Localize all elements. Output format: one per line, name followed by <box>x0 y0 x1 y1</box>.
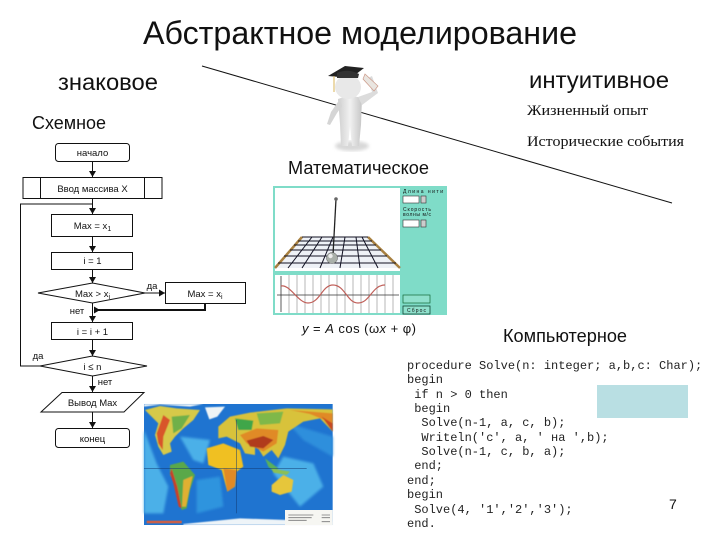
code listing: begin <box>407 488 443 502</box>
label exit no: нет <box>98 377 113 388</box>
heading: intuitive modelling: интуитивное <box>529 67 669 93</box>
control panel <box>403 189 443 314</box>
heading: mathematical: Математическое <box>288 158 429 178</box>
code listing <box>407 359 702 531</box>
code listing: Solve(4, '1','2','3'); <box>407 503 573 517</box>
code listing: begin <box>407 373 443 387</box>
label loop yes: да <box>33 351 44 362</box>
heading: schematic: Схемное <box>32 113 106 133</box>
heading: computer: Компьютерное <box>503 326 627 346</box>
text: life experience: Жизненный опыт <box>527 103 648 119</box>
code listing: end; <box>407 474 436 488</box>
code listing: Solve(n-1, c, b, a); <box>407 445 565 459</box>
assignment Max <box>52 214 132 236</box>
decision i less than n <box>40 356 147 376</box>
continents <box>144 404 333 525</box>
code listing: end. <box>407 517 436 531</box>
title: Абстрактное моделирование <box>143 15 577 51</box>
label yes: да <box>147 281 158 292</box>
diagonal divider line <box>202 66 672 203</box>
decision Max greater than x: Max > x <box>75 289 108 300</box>
text: historical events: Исторические события <box>527 134 684 150</box>
icon: graduate figure with diploma <box>327 66 378 151</box>
assignment Max: Max = x <box>74 221 107 232</box>
code listing: if n > 0 then <box>407 388 508 402</box>
code listing: procedure Solve(n: integer; a,b,c: Char); <box>407 359 702 373</box>
flow connectors <box>20 161 205 428</box>
decision i less than n: i ≤ n <box>84 362 101 373</box>
flowchart <box>20 144 246 448</box>
label no: нет <box>70 306 85 317</box>
code listing: begin <box>407 402 450 416</box>
elevation scale <box>147 521 182 523</box>
world map <box>144 404 333 525</box>
assignment Max from x: i <box>221 294 223 301</box>
end node: конец <box>80 434 106 445</box>
code listing: Writeln('c', a, ' на ',b); <box>407 431 609 445</box>
input node <box>23 178 162 198</box>
formula: y = A cos (ωx + φ) <box>301 321 416 336</box>
assignment Max from x: Max = x <box>187 289 221 300</box>
assignment i: i = 1 <box>83 256 102 267</box>
control panel: Сброс <box>407 308 426 314</box>
decision Max greater than x: i <box>108 294 110 301</box>
input node: Ввод массива X <box>57 184 128 195</box>
control panel: Скорость <box>403 207 431 213</box>
map legend <box>285 510 333 525</box>
graticule <box>144 420 307 513</box>
code listing: end; <box>407 459 443 473</box>
shallow water <box>144 423 333 513</box>
end node <box>56 428 130 448</box>
3D scene <box>275 188 400 271</box>
wave graph <box>275 275 400 313</box>
assignment Max: 1 <box>107 226 111 233</box>
highlight rectangle <box>597 385 688 418</box>
start node: начало <box>77 148 108 159</box>
code listing: Solve(n-1, a, c, b); <box>407 416 565 430</box>
assignment Max from x <box>166 282 246 304</box>
pendulum simulation panel <box>273 186 447 315</box>
increment: i = i + 1 <box>77 327 108 338</box>
decision Max greater than x <box>38 283 145 303</box>
page number: 7 <box>669 496 677 512</box>
assignment i <box>52 252 132 270</box>
control panel: Длина нити <box>403 189 443 195</box>
increment <box>52 322 132 340</box>
heading: sign modelling: знаковое <box>58 69 158 95</box>
control panel: волны м/с <box>403 212 432 218</box>
output node <box>41 392 144 412</box>
start node <box>56 144 130 162</box>
output node: Вывод Max <box>68 398 117 409</box>
